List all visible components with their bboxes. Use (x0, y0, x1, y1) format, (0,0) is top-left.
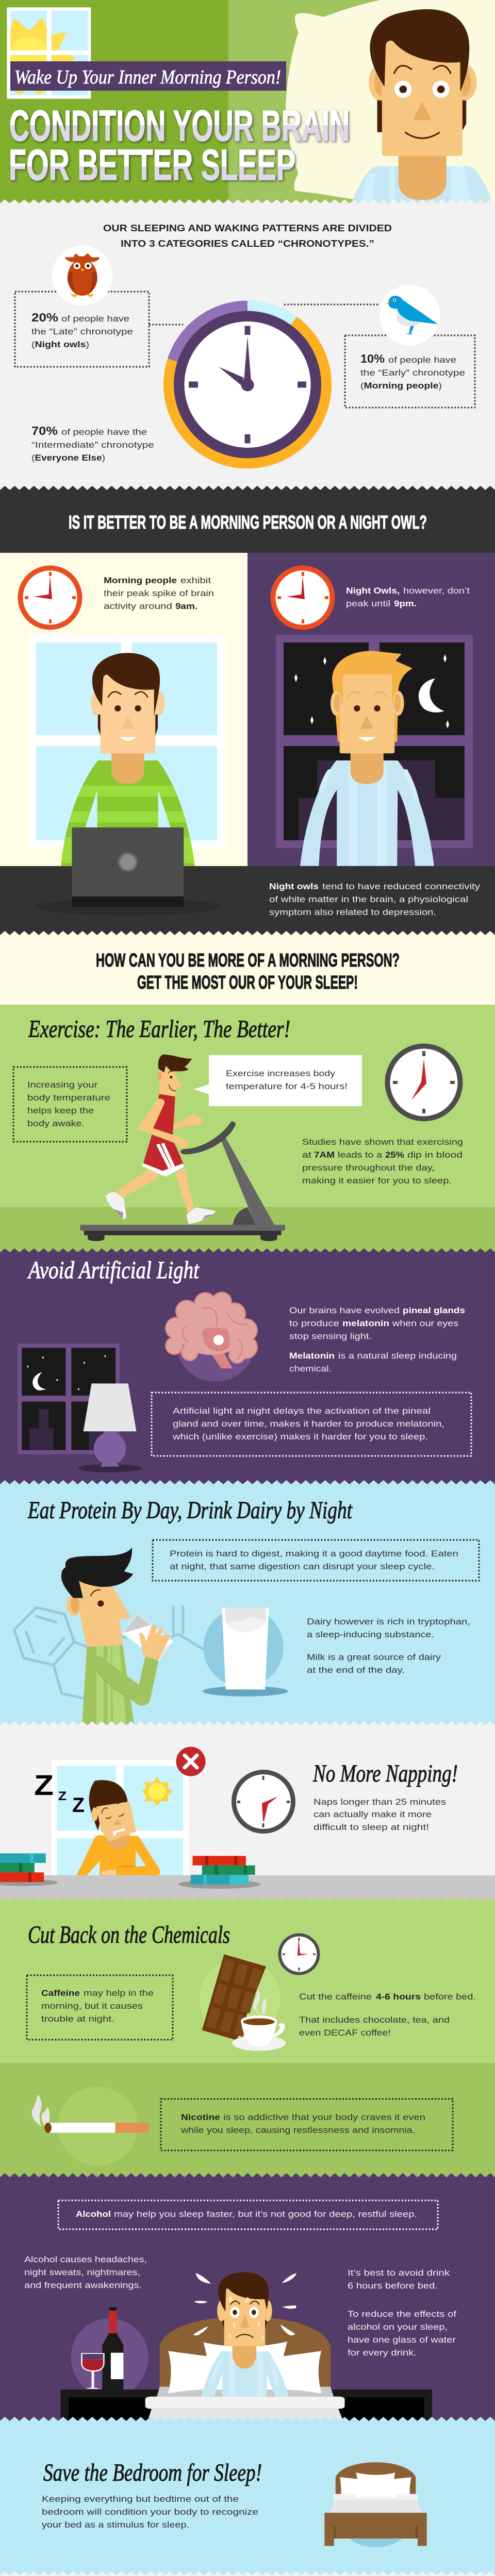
text: cut caffeine: before bed. (424, 1992, 476, 2002)
panel: header (0, 0, 495, 203)
callout box: Protein is hard to digest, making it a good daytime food. Eaten (170, 1549, 458, 1558)
text: cut caffeine: even DECAF coffee! (299, 2028, 391, 2038)
illustration: morning man (57, 653, 199, 866)
text: night owls: peak until (346, 599, 390, 608)
text: cut caffeine: Cut the caffeine (299, 1992, 372, 2002)
illustration: sunrise window (7, 7, 91, 99)
text: bedroom: your bed as a stimulus for sleep. (42, 2520, 189, 2530)
banner (10, 61, 286, 91)
text: avoid drink: 6 hours before bed. (348, 2281, 438, 2291)
text: alcohol effects (24, 2255, 147, 2290)
text: white matter: symptom also related to depression. (269, 907, 436, 917)
banner: Wake Up Your Inner Morning Person! (14, 66, 281, 88)
icon: no nap cross (176, 1747, 205, 1776)
text: avoid drink: have one glass of water (348, 2335, 456, 2345)
text: morning people: exhibit (180, 575, 211, 585)
stat: intermediate (31, 424, 154, 463)
panel: morning or night (0, 486, 495, 935)
panel: chemicals (0, 1897, 495, 2063)
stat: intermediate: (Everyone Else ) (31, 453, 105, 463)
text: studies (302, 1137, 463, 1185)
callout box: night owls: (Night owls ) (31, 340, 89, 349)
heading: Eat Protein By Day, Drink Dairy by Night (27, 1497, 353, 1524)
illustration: molecule and milk glass (14, 1606, 288, 1700)
text: pineal glands (289, 1306, 465, 1374)
illustration: night owl man (300, 651, 434, 866)
text: cut caffeine: That includes chocolate, tea, and (299, 2015, 450, 2025)
panel: alcohol (0, 2173, 495, 2421)
callout box: body temperature (27, 1093, 110, 1103)
callout box: morning people: the “Early” chronotype (360, 368, 465, 378)
text: morning people: activity around (104, 601, 172, 611)
callout box (58, 2200, 438, 2229)
text: night owls: Night Owls, (346, 586, 400, 596)
text: studies: Studies have shown that exercising (302, 1137, 463, 1147)
callout box: is so addictive that your body craves it even (223, 2112, 425, 2122)
callout box: Increasing your (27, 1080, 97, 1090)
callout box: night owls (15, 292, 183, 367)
callout box: night owls: 20% (31, 311, 58, 324)
callout box: Alcohol (76, 2209, 111, 2219)
text: white matter: tend to have reduced connectivity (322, 882, 481, 891)
intro heading (103, 223, 392, 249)
callout box: trouble at night. (41, 2014, 114, 2024)
chart: chronotype clock donut (163, 300, 332, 469)
text: alcohol effects: Alcohol causes headaches, (24, 2255, 147, 2264)
text: cut caffeine: 4-6 hours (376, 1992, 421, 2002)
text: morning people: their peak spike of brain (104, 588, 214, 598)
text: dairy (307, 1617, 470, 1675)
text: morning people: 9am. (175, 601, 197, 611)
speech bubble (193, 1055, 362, 1106)
illustration: sick man in bed (145, 2272, 345, 2421)
text: naps: can actually make it more (314, 1809, 432, 1819)
icon: bird (380, 285, 440, 345)
stat: intermediate: of people have the (61, 427, 147, 437)
panel: exercise (0, 1005, 495, 1252)
panel: alarm apps (0, 2571, 495, 2576)
heading: Exercise: The Earlier, The Better! (28, 1015, 290, 1043)
intro heading: OUR SLEEPING AND WAKING PATTERNS ARE DIVIDED (103, 223, 392, 233)
text: pineal glands: to produce (289, 1318, 339, 1328)
text: white matter: of white matter in the brain, a physiological (269, 894, 468, 904)
text: avoid drink: To reduce the effects of (348, 2309, 456, 2319)
callout box: night owls: the “Late” chronotype (31, 327, 133, 336)
text: pineal glands: when our eyes (392, 1318, 458, 1328)
illustration: cigarette (32, 2087, 148, 2165)
illustration: napping window and man (52, 1760, 189, 1875)
text: naps: Naps longer than 25 minutes (314, 1797, 446, 1807)
panel: no more napping (0, 1721, 495, 1901)
text: cut caffeine (299, 1992, 476, 2038)
text: studies: pressure throughout the day, (302, 1163, 435, 1173)
icon: sleep z: Z (34, 1769, 54, 1801)
text: studies: dip in blood (407, 1150, 463, 1160)
illustration: chocolate and coffee (200, 1954, 286, 2051)
text: dairy: at the end of the day. (307, 1665, 405, 1675)
text: pineal glands: chemical. (289, 1364, 332, 1374)
panel: bedroom (0, 2417, 495, 2575)
heading: Save the Bedroom for Sleep! (43, 2459, 262, 2486)
text: studies: leads to a (338, 1150, 383, 1160)
text: night owls (346, 586, 470, 608)
text: pineal glands: pineal glands (403, 1306, 465, 1315)
panel: how to heading (0, 931, 495, 1005)
callout box: morning people: of people have (388, 355, 456, 365)
illustration: man drinking (61, 1547, 173, 1725)
intro heading: INTO 3 CATEGORIES CALLED “CHRONOTYPES.” (121, 239, 374, 249)
callout box: morning people: 10% (360, 352, 385, 365)
panel: chronotypes (0, 199, 495, 490)
clock: four hours (278, 1933, 320, 1975)
text: studies: 7AM (314, 1150, 335, 1160)
text: alcohol effects: and frequent awakenings. (24, 2280, 142, 2290)
illustration: night window (276, 635, 473, 848)
text: avoid drink: It’s best to avoid drink (348, 2268, 450, 2278)
text: night owls: 9pm. (394, 599, 417, 608)
icon: sleep z (34, 1769, 85, 1817)
text: dairy: Dairy however is rich in tryptophan, (307, 1617, 470, 1626)
callout box: at night, that same digestion can disrupt your sleep cycle. (170, 1562, 435, 1571)
text: pineal glands: melatonin (342, 1318, 389, 1328)
text: bedroom: Keeping everything but bedtime out of the (42, 2494, 239, 2504)
callout box (13, 1067, 127, 1142)
illustration: day window (28, 635, 225, 848)
callout box: may help in the (84, 1988, 154, 1998)
stat: intermediate: “Intermediate” chronotype (31, 440, 154, 450)
callout box: morning people (284, 304, 475, 408)
stat: intermediate: 70% (31, 424, 58, 437)
text: dairy: Milk is a great source of dairy (307, 1652, 441, 1662)
heading: Avoid Artificial Light (27, 1257, 200, 1284)
text: naps (314, 1797, 446, 1832)
icon: books (0, 1853, 260, 1889)
text: pineal glands: stop sensing light. (289, 1331, 372, 1341)
panel: artificial light (0, 1248, 495, 1484)
text: pineal glands: is a natural sleep inducing (338, 1351, 457, 1361)
text: avoid drink: for every drink. (348, 2348, 417, 2358)
callout box: body awake. (27, 1118, 85, 1128)
callout box: which (unlike exercise) makes it harder for you to sleep. (172, 1432, 428, 1442)
callout box: while you sleep, causing restlessness and insomnia. (180, 2125, 415, 2135)
icon: laptop (36, 827, 220, 916)
text: night owls: however, don’t (403, 586, 470, 596)
clock: nap (232, 1770, 295, 1834)
text: pineal glands: Our brains have evolved (289, 1306, 400, 1315)
icon: sleep z: Z (58, 1789, 67, 1803)
icon: bed (324, 2462, 427, 2547)
icon: owl (52, 246, 113, 306)
panel: how to heading: GET THE MOST OUR OF YOUR SLEEP! (137, 972, 358, 993)
title (9, 101, 350, 189)
callout box (153, 1540, 479, 1581)
callout box: may help you sleep faster, but it’s not good for deep, restful sleep. (114, 2209, 417, 2219)
illustration: wine (71, 2307, 148, 2389)
panel: nicotine (0, 2063, 495, 2177)
text: studies: 25% (385, 1150, 404, 1160)
callout box: gland and over time, makes it harder to produce melatonin, (173, 1419, 444, 1429)
callout box: Nicotine (181, 2112, 220, 2122)
heading: No More Napping! (312, 1760, 458, 1787)
callout box: Artificial light at night delays the activation of the pineal (173, 1406, 431, 1416)
clock: 9am (18, 566, 82, 630)
callout box: morning people: (Morning people ) (360, 381, 442, 391)
text: pineal glands: Melatonin (289, 1351, 335, 1361)
speech bubble: temperature for 4-5 hours! (226, 1081, 348, 1091)
text: alcohol effects: night sweats, nightmares, (24, 2267, 140, 2277)
callout box (27, 1975, 173, 2040)
illustration: man on pillow (286, 0, 495, 203)
text: morning people (104, 575, 214, 611)
text: white matter: Night owls (269, 882, 319, 891)
text: morning people: Morning people (104, 575, 177, 585)
text: dairy: a sleep-inducing substance. (307, 1630, 434, 1639)
text: studies: at (302, 1150, 311, 1160)
speech bubble: Exercise increases body (226, 1069, 336, 1078)
text: studies: making it easier for you to sleep. (302, 1176, 452, 1185)
illustration: window and lamp (18, 1344, 142, 1472)
callout box: Caffeine (41, 1988, 80, 1998)
callout box: night owls: of people have (61, 314, 129, 324)
clock: 9pm (270, 566, 335, 630)
text: avoid drink: alcohol on your sleep, (348, 2322, 448, 2332)
clock: 7am (385, 1044, 463, 1121)
callout box (161, 2099, 453, 2150)
illustration: night tables (61, 2389, 432, 2421)
callout box: helps keep the (27, 1106, 94, 1115)
panel: protein and dairy (0, 1480, 495, 1725)
text: bedroom (42, 2494, 258, 2530)
callout box: morning, but it causes (41, 2001, 143, 2011)
callout box (152, 1393, 471, 1456)
title: FOR BETTER SLEEP (9, 141, 295, 189)
heading: Cut Back on the Chemicals (28, 1921, 230, 1948)
text: white matter (269, 882, 481, 917)
text: naps: difficult to sleep at night! (314, 1822, 429, 1832)
text: avoid drink (348, 2268, 456, 2358)
icon: sleep z: Z (72, 1794, 85, 1817)
illustration: runner on treadmill (80, 1055, 285, 1241)
text: bedroom: bedroom will condition your body to recognize (42, 2507, 258, 2517)
icon: brain (165, 1292, 258, 1382)
